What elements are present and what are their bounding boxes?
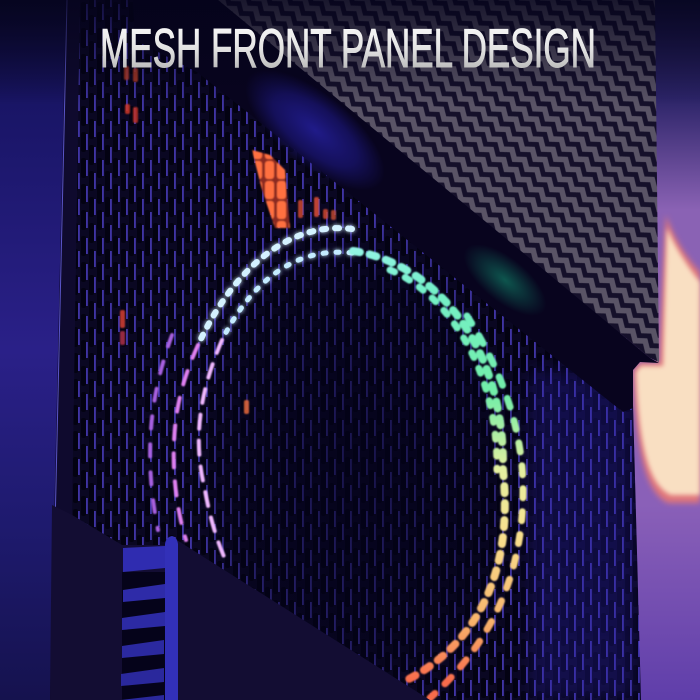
background: left blue wall [0,0,90,700]
ring LEDs: top-left white-cyan arcs [198,228,352,345]
vent slat 1 [123,546,165,572]
background: right lavender wall [620,0,700,700]
vent slat 2 [123,584,165,602]
dim red light spots [120,66,336,414]
blue reflection on band [226,49,404,211]
vent slat 6 [121,695,164,700]
carbon fibre top panel [218,0,659,362]
vent slat 3 [122,612,165,630]
dark angled band under carbon panel [133,0,659,412]
mesh blue glow at right [530,370,635,700]
top shading [0,0,700,105]
fan interior shadow [190,220,530,700]
case frame with highlight line [50,0,90,700]
ring LEDs: rainbow right side [353,251,523,698]
intake vent with blue slats [121,536,178,700]
green reflection on band [452,231,558,329]
ring LEDs: pink left side [150,335,228,565]
orange light through mesh [251,149,291,230]
vent slat 4 [122,640,164,658]
lower front panel [50,505,430,700]
vent slat 5 [121,668,164,686]
vertical vent rib [165,536,178,700]
glow: bright peach light behind case [633,215,700,503]
